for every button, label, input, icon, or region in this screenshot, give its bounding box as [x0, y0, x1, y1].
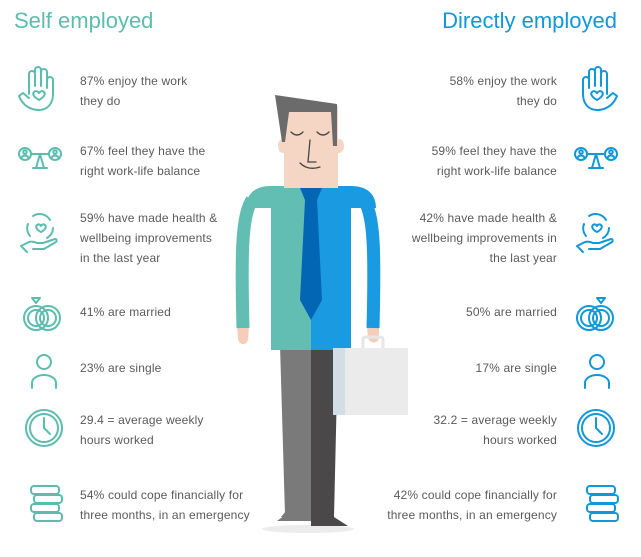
head: [278, 139, 288, 153]
text: right balance: right work-life balance: [437, 164, 557, 178]
icon: left coins: [30, 485, 63, 522]
text: left hours: [80, 413, 204, 447]
hands: [237, 326, 249, 344]
text: right health: [412, 211, 557, 265]
title: self employed: Self employed: [14, 8, 153, 33]
legs: [277, 345, 311, 521]
text: right finance: [387, 488, 557, 522]
icon: right rings: [576, 297, 614, 331]
text: left balance: [80, 144, 205, 178]
text: right finance: three months, in an emergency: [387, 508, 557, 522]
text: left health: 59% have made health &: [80, 211, 217, 225]
text: right hours: hours worked: [483, 433, 557, 447]
text: left health: in the last year: [80, 251, 160, 265]
text: right hours: 32.2 = average weekly: [433, 413, 557, 427]
icon: right health: [576, 213, 614, 253]
text: right balance: [432, 144, 557, 178]
torso: [246, 186, 311, 350]
icon: left balance: [18, 147, 62, 169]
icon: right person: [584, 354, 610, 389]
icon: right clock: [577, 409, 615, 447]
text: right health: wellbeing improvements in: [412, 231, 557, 245]
icon: right coins: [586, 485, 619, 522]
icon: right balance: [574, 147, 618, 169]
text: left finance: three months, in an emergency: [80, 508, 250, 522]
text: left balance: right work-life balance: [80, 164, 200, 178]
text: left enjoy: they do: [80, 94, 120, 108]
text: right health: the last year: [490, 251, 557, 265]
text: right health: 42% have made health &: [420, 211, 557, 225]
icon: left health: [20, 213, 58, 253]
text: left hours: hours worked: [80, 433, 154, 447]
text: left married: 41% are married: [80, 305, 171, 319]
text: right finance: 42% could cope financially for: [394, 488, 557, 502]
text: right single: 17% are single: [476, 361, 557, 375]
briefcase: [363, 337, 383, 348]
text: right balance: 59% feel they have the: [432, 144, 557, 158]
icon: left person: [31, 354, 57, 389]
text: left single: 23% are single: [80, 361, 161, 375]
text: right enjoy: [450, 74, 557, 108]
icon: left rings: [23, 297, 61, 331]
arms blue: [364, 200, 374, 328]
text: left finance: [80, 488, 250, 522]
text: right married: 50% are married: [466, 305, 557, 319]
text: left finance: 54% could cope financially for: [80, 488, 243, 502]
title: directly employed: Directly employed: [442, 8, 617, 33]
text: left enjoy: 87% enjoy the work: [80, 74, 187, 88]
icon: right hand heart: [582, 66, 618, 111]
text: left health: [80, 211, 218, 265]
text: right enjoy: 58% enjoy the work: [450, 74, 557, 88]
icon: left hand heart: [18, 66, 54, 111]
text: left hours: 29.4 = average weekly: [80, 413, 204, 427]
arms teal: [242, 200, 252, 328]
text: left balance: 67% feel they have the: [80, 144, 205, 158]
text: left enjoy: [80, 74, 188, 108]
text: right hours: [433, 413, 557, 447]
text: right enjoy: they do: [517, 94, 557, 108]
icon: left clock: [25, 409, 63, 447]
text: left health: wellbeing improvements: [80, 231, 212, 245]
